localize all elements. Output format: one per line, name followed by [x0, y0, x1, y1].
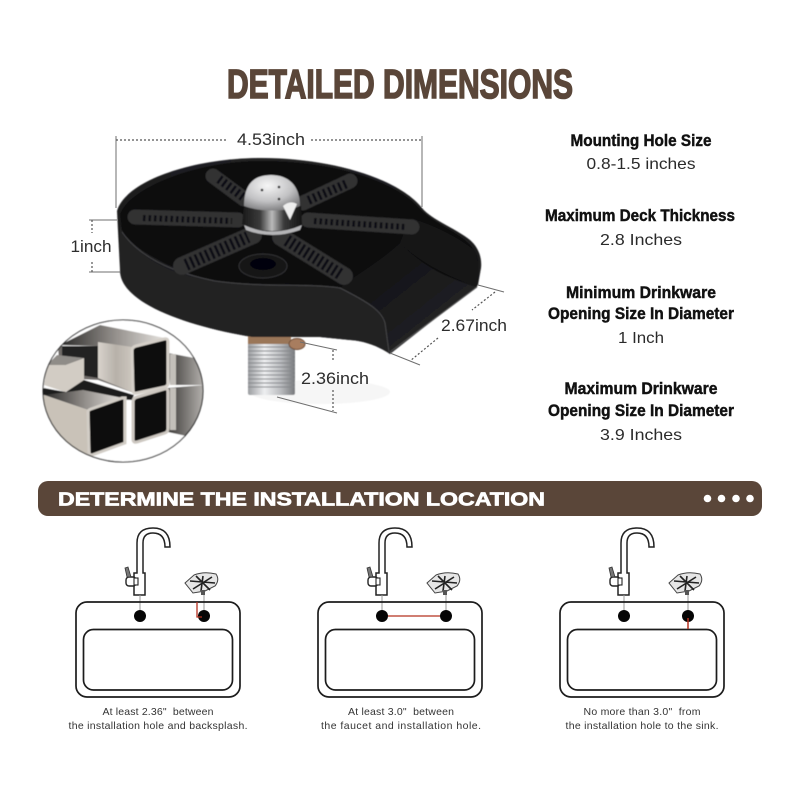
lower left tube faces: [44, 390, 123, 410]
small left tube end: [44, 358, 84, 392]
product photo: glass rinser: [117, 158, 481, 404]
caption: [68, 706, 248, 732]
section header bar: DETERMINE THE INSTALLATION LOCATION: [58, 488, 545, 510]
caption: No more than 3.0" from: [584, 706, 701, 718]
panel: sink distance: [560, 528, 724, 732]
spec: minimum drinkware opening: Opening Size In Diameter: [548, 305, 735, 323]
spec: mounting hole size: Mounting Hole Size: [570, 132, 712, 150]
spec: mounting hole size: 0.8-1.5 inches: [586, 156, 696, 173]
icon: threaded mounting shank: [248, 336, 305, 395]
icon: chrome hub and dome: [242, 201, 302, 231]
red measure line: [687, 618, 689, 629]
shadow under the rinser: [250, 380, 390, 404]
front wall: [120, 225, 390, 354]
spec: maximum drinkware opening: [548, 380, 735, 444]
rinser body: [117, 158, 481, 354]
caption: [566, 706, 718, 732]
spec: maximum deck thickness: 2.8 Inches: [600, 232, 682, 249]
dimension: height 1 inch: 1inch: [70, 238, 112, 256]
inner basin: [120, 161, 478, 352]
caption: At least 3.0" between: [348, 706, 454, 718]
panel: faucet clearance: [318, 528, 482, 732]
spec: maximum drinkware opening: Opening Size In Diameter: [548, 402, 735, 420]
caption: the faucet and installation hole.: [321, 720, 481, 732]
right side tubes: [168, 353, 205, 385]
caption: At least 2.36" between: [102, 706, 214, 718]
dimension: shank 2.36 inch: 2.36inch: [301, 370, 369, 388]
red measure line: [388, 615, 440, 617]
spec: minimum drinkware opening: [548, 284, 735, 347]
dimension: height 1 inch: [70, 220, 120, 272]
dimension: spout 2.67 inch: 2.67inch: [441, 317, 507, 335]
spec: minimum drinkware opening: Minimum Drinkware: [566, 284, 716, 302]
spec: mounting hole size: [570, 132, 712, 173]
icon: drain ring: [239, 254, 287, 278]
caption: the installation hole and backsplash.: [68, 720, 248, 732]
panel: backsplash clearance: [68, 528, 248, 732]
dimension: shank 2.36 inch: [277, 342, 369, 413]
spec: maximum drinkware opening: 3.9 Inches: [600, 427, 682, 444]
dimension: width 4.53 inch: 4.53inch: [237, 131, 305, 149]
caption: [321, 706, 481, 732]
spec: maximum deck thickness: [545, 207, 735, 249]
inset photo: stainless steel tubes: [40, 320, 205, 462]
upper long tube faces: [60, 325, 165, 347]
red measure line: [197, 602, 202, 617]
dimension: spout 2.67 inch: [390, 285, 507, 365]
middle dark band: [40, 380, 134, 400]
section header bar: [38, 481, 762, 516]
square tube openings: [132, 339, 168, 393]
spec: maximum drinkware opening: Maximum Drinkware: [564, 380, 718, 398]
spout wall: [400, 218, 478, 287]
spout floor: [340, 243, 477, 352]
dimension: width 4.53 inch: [116, 131, 422, 208]
caption: the installation hole to the sink.: [566, 720, 718, 732]
spec: minimum drinkware opening: 1 Inch: [618, 330, 664, 347]
spec: maximum deck thickness: Maximum Deck Thickness: [545, 207, 735, 225]
title: DETAILED DIMENSIONS: [227, 61, 573, 107]
icon: six spray arms: [135, 176, 412, 276]
